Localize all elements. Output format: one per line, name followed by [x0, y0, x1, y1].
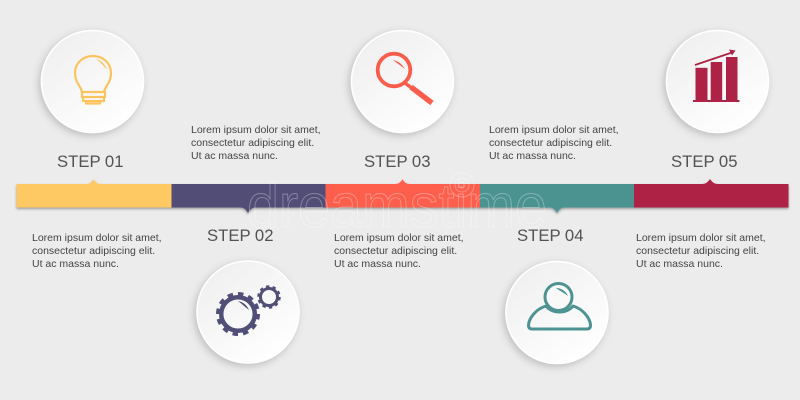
text: step 05: Ut ac massa nunc.	[636, 258, 723, 270]
segment 5	[634, 179, 788, 208]
step 1 circle	[42, 30, 144, 132]
text: step 01: consectetur adipiscing elit.	[32, 245, 155, 257]
text: step 03: consectetur adipiscing elit.	[334, 245, 457, 257]
icon: bar chart with arrow	[693, 50, 740, 102]
step 3 circle	[352, 30, 454, 132]
icon: gears	[218, 286, 280, 334]
segment 1	[16, 179, 172, 208]
segment 2	[172, 184, 326, 213]
label: step 02: STEP 02	[207, 226, 273, 245]
text: step 02: Lorem ipsum dolor sit amet,	[191, 124, 321, 136]
label: step 03: STEP 03	[364, 152, 430, 171]
label: step 01: STEP 01	[57, 152, 123, 171]
text: step 01: Lorem ipsum dolor sit amet,	[32, 232, 162, 244]
watermark: dreamstime	[247, 172, 547, 241]
text: step 02: consectetur adipiscing elit.	[191, 137, 314, 149]
label: step 05: STEP 05	[671, 152, 737, 171]
text: step 01: Ut ac massa nunc.	[32, 258, 119, 270]
text: step 03: Ut ac massa nunc.	[334, 258, 421, 270]
text: step 05: Lorem ipsum dolor sit amet,	[636, 232, 766, 244]
step labels	[57, 152, 737, 245]
step 2 circle	[197, 261, 299, 363]
timeline bar	[16, 179, 788, 213]
text: step 05: consectetur adipiscing elit.	[636, 245, 759, 257]
icon: magnifying glass	[378, 54, 432, 103]
icon: light bulb	[75, 56, 111, 104]
step 4 circle	[506, 262, 608, 364]
segment 4	[480, 184, 634, 213]
description texts	[32, 124, 766, 270]
text: step 04: Ut ac massa nunc.	[489, 150, 576, 162]
icon: person	[528, 284, 590, 329]
segment 3	[326, 179, 480, 208]
step 5 circle	[666, 30, 768, 132]
text: step 04: consectetur adipiscing elit.	[489, 137, 612, 149]
text: step 03: Lorem ipsum dolor sit amet,	[334, 232, 464, 244]
text: step 02: Ut ac massa nunc.	[191, 150, 278, 162]
text: step 04: Lorem ipsum dolor sit amet,	[489, 124, 619, 136]
label: step 04: STEP 04	[517, 226, 583, 245]
